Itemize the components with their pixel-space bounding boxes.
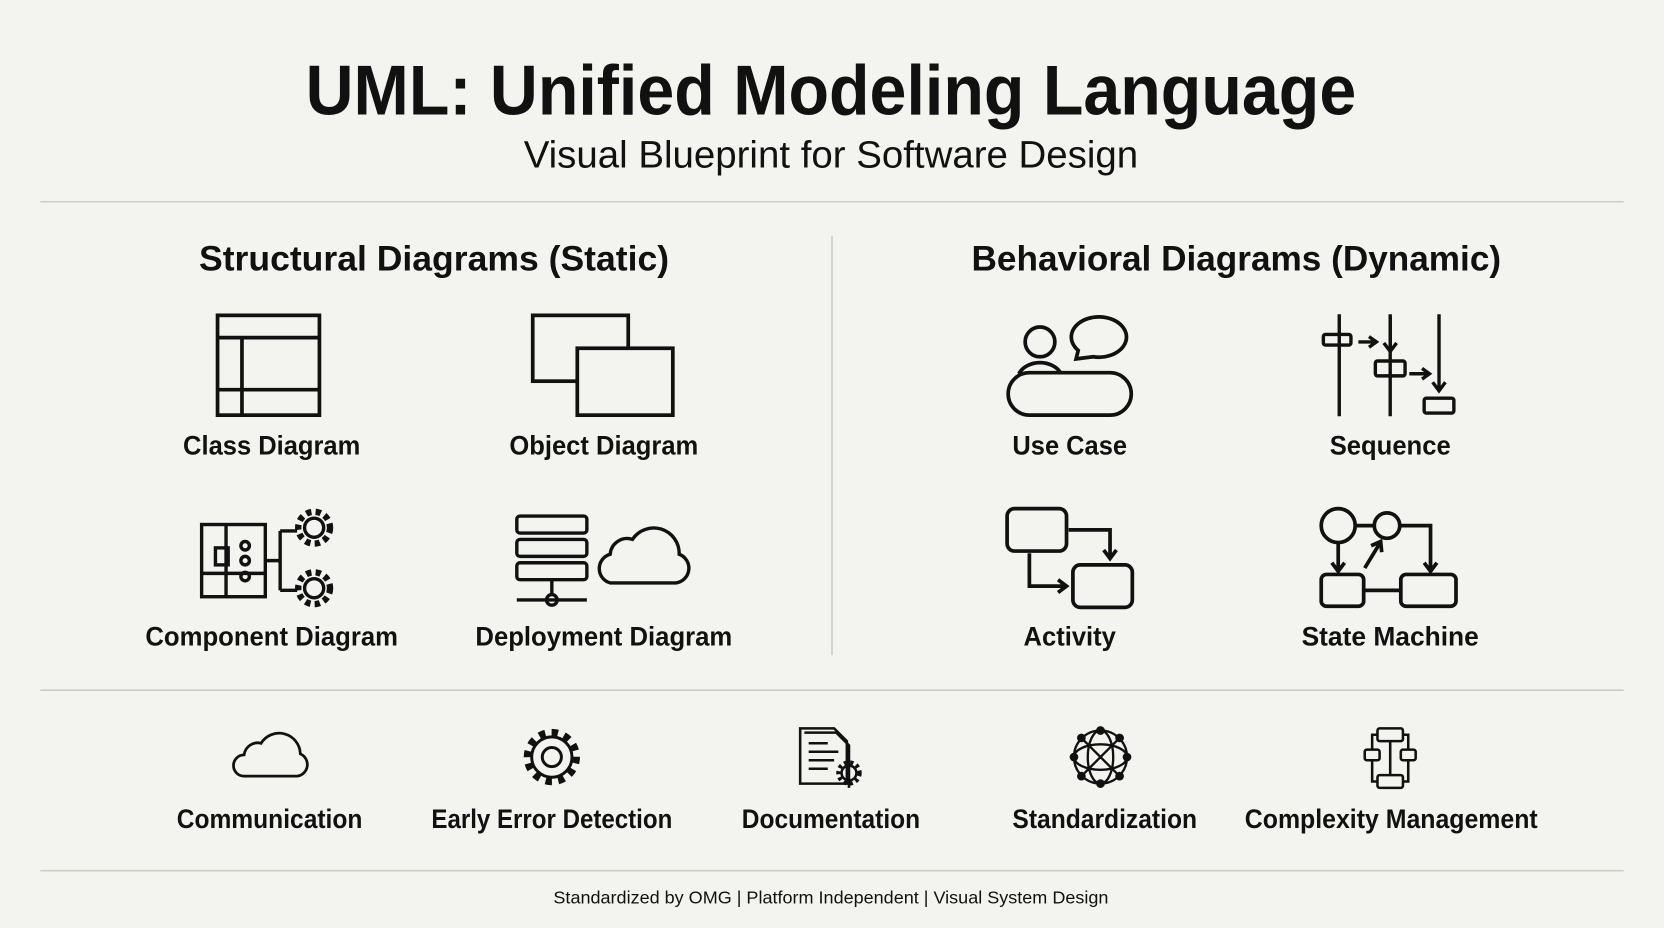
label: deployment diagram: Deployment Diagram <box>475 622 732 652</box>
icon: sequence <box>1323 314 1454 416</box>
label: early error detection: Early Error Detection <box>431 804 672 834</box>
icon: complexity flowchart <box>1365 728 1416 788</box>
label: standardization: Standardization <box>1012 804 1197 834</box>
icon: standardization network <box>1071 727 1130 787</box>
label: object diagram: Object Diagram <box>509 430 698 460</box>
label: component diagram: Component Diagram <box>145 622 398 652</box>
label: class diagram: Class Diagram <box>183 430 360 460</box>
label: complexity management: Complexity Management <box>1245 804 1538 834</box>
heading: structural: Structural Diagrams (Static) <box>199 240 669 279</box>
icon: gear <box>527 733 576 781</box>
icon: documentation <box>800 728 860 788</box>
heading: behavioral: Behavioral Diagrams (Dynamic) <box>972 240 1501 279</box>
label: documentation: Documentation <box>742 804 920 834</box>
label: sequence: Sequence <box>1330 430 1451 460</box>
label: state machine: State Machine <box>1302 622 1479 652</box>
icon: deployment diagram <box>517 516 689 605</box>
label: communication: Communication <box>177 804 362 834</box>
panel: benefits <box>177 727 1538 834</box>
icon: state machine <box>1321 509 1456 606</box>
title: UML: Unified Modeling Language <box>306 52 1356 130</box>
icon: communication cloud <box>233 733 307 776</box>
icon: activity <box>1007 509 1132 607</box>
icon: use case <box>1008 317 1131 415</box>
icon: class diagram <box>218 315 319 415</box>
footer: Standardized by OMG | Platform Independent | Visual System Design <box>553 888 1108 908</box>
label: activity: Activity <box>1024 622 1116 652</box>
icon: component diagram <box>202 512 330 604</box>
label: use case: Use Case <box>1012 430 1127 460</box>
icon: object diagram <box>533 315 673 415</box>
panel: structural diagrams <box>145 240 732 652</box>
subtitle: Visual Blueprint for Software Design <box>524 134 1138 177</box>
panel: behavioral diagrams <box>972 240 1501 652</box>
